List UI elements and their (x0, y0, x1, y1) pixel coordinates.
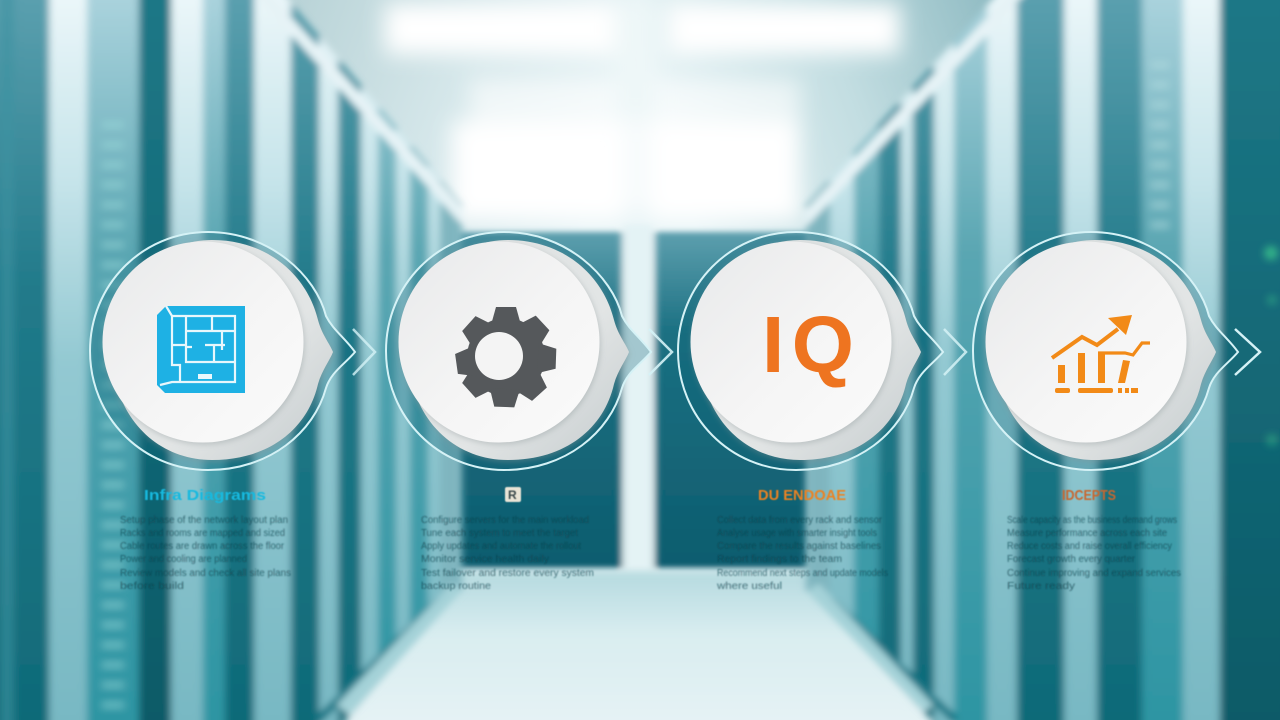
text block: step 4: Continue improving and expand services (1007, 568, 1181, 579)
icon: floor plan (157, 306, 245, 393)
arrow chevron 3 (944, 329, 966, 375)
heading: step 2 (505, 487, 521, 502)
arrow chevron 2 (649, 329, 672, 375)
text block: step 4: Future ready (1007, 581, 1075, 592)
icon: growth chart (1052, 315, 1150, 393)
text block: step 2: Monitor service health daily (421, 554, 549, 565)
text block: step 2: Test failover and restore every system (421, 568, 594, 579)
text block: step 4: Scale capacity as the business demand grows (1007, 515, 1177, 526)
icon: gear (454, 307, 556, 407)
text block: step 2: backup routine (421, 581, 491, 592)
text block: step 1: Cable routes are drawn across the floor (120, 541, 285, 552)
heading: step 3: DU ENDOAE (758, 487, 846, 504)
step 4: growth chart bubble (973, 232, 1260, 470)
text block: step 1 (120, 515, 291, 592)
text block: step 1: Review models and check all site plans (120, 568, 291, 579)
text block: step 3: Collect data from every rack and sensor (717, 515, 883, 526)
text block: step 3: Recommend next steps and update models (717, 568, 888, 579)
text block: step 2: Tune each system to meet the target (421, 528, 578, 539)
text block: step 1: before build (120, 581, 184, 592)
text block: step 3: Analyse usage with smarter insight tools (717, 528, 877, 539)
text block: step 1: Racks and rooms are mapped and sized (120, 528, 285, 539)
icon: IQ letters: IQ (762, 300, 854, 389)
arrow chevron 4 (1235, 329, 1260, 375)
text block: step 2: Apply updates and automate the rollout (421, 541, 581, 552)
text block: step 4 (1007, 515, 1181, 592)
heading: step 4: IDCEPTS (1062, 487, 1116, 504)
step 3: IQ bubble (678, 232, 966, 470)
text block: step 1: Power and cooling are planned (120, 554, 247, 565)
heading: step 1: Infra Diagrams (144, 487, 266, 504)
heading: step 2: R (508, 488, 517, 502)
text block: step 2 (421, 515, 594, 592)
step 2: gear bubble (386, 232, 672, 470)
arrow chevron 1 (353, 329, 375, 375)
text block: step 3: Compare the results against baselines (717, 541, 881, 552)
step 1: floor plan bubble (90, 232, 375, 470)
text block: step 1: Setup phase of the network layout plan (120, 515, 288, 526)
text block: step 2: Configure servers for the main workload (421, 515, 589, 526)
text block: step 3 (716, 515, 888, 592)
text block: step 4: Reduce costs and raise overall efficiency (1007, 541, 1172, 552)
text block: step 3: where useful (716, 581, 782, 592)
text block: step 4: Forecast growth every quarter (1007, 554, 1136, 565)
text block: step 4: Measure performance across each site (1007, 528, 1167, 539)
text block: step 3: Report findings to the team (717, 554, 842, 565)
